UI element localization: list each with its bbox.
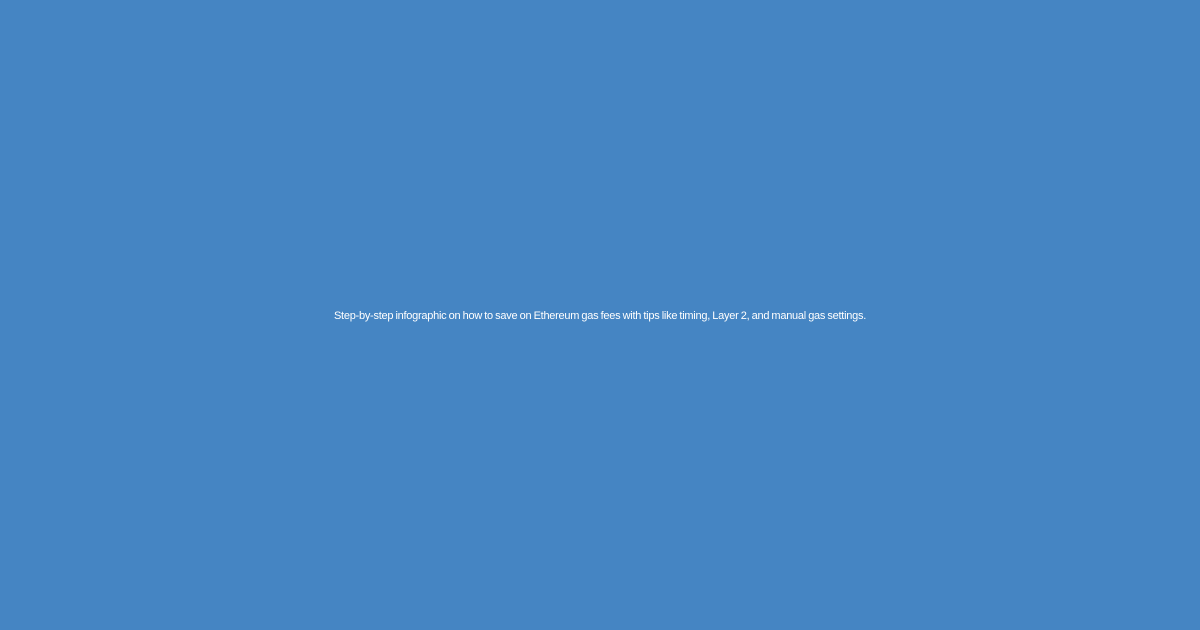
description text: Step-by-step infographic on how to save on Ethereum gas fees with tips like timing, Layer 2, and manual gas settings. (334, 310, 866, 322)
